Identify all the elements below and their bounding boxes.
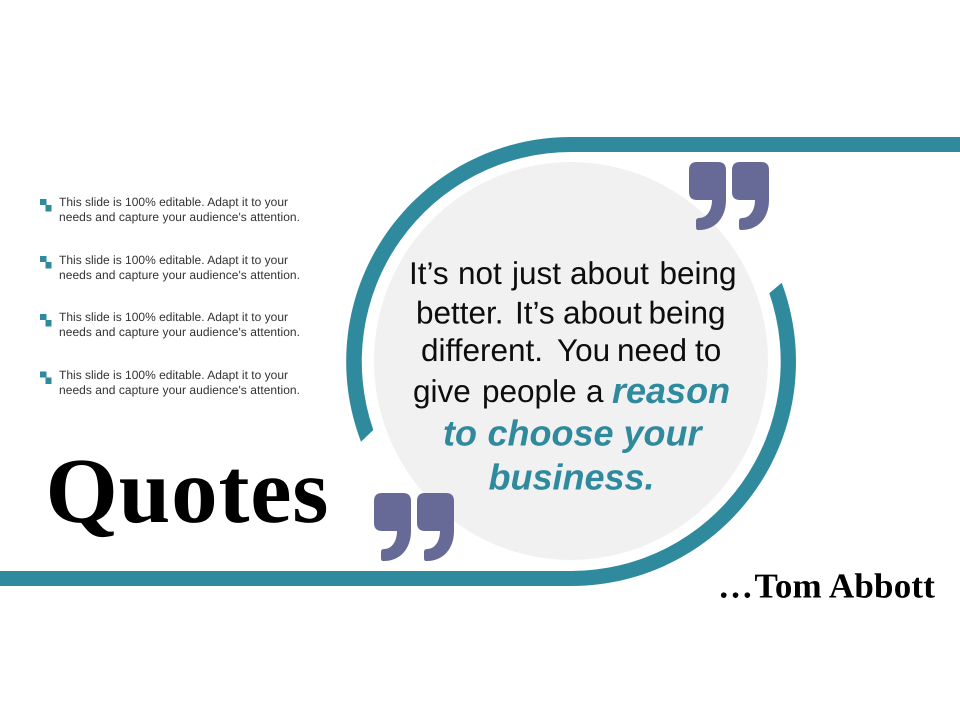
- bullet item 4: [40, 368, 300, 397]
- quote text: people: [482, 373, 577, 409]
- quote text: a: [586, 373, 604, 409]
- attribution: …: [718, 566, 753, 606]
- bullet item 3: [40, 310, 300, 339]
- panel: gray quote circle: [374, 162, 768, 560]
- quote text: better.: [416, 294, 504, 330]
- bullet item 2: needs and capture your audience's attention.: [59, 268, 300, 282]
- bullet item 4: needs and capture your audience's attention.: [59, 383, 300, 397]
- quote text: to: [443, 412, 477, 454]
- quote text: reason: [612, 370, 730, 411]
- quote text: about: [570, 255, 649, 291]
- bullet item 4: This slide is 100% editable. Adapt it to your: [59, 368, 288, 382]
- quote text: You: [557, 332, 610, 368]
- quote text: It’s: [409, 255, 449, 291]
- quote text: just: [511, 255, 561, 291]
- quote text: different.: [421, 332, 543, 368]
- bullet item 1: [40, 195, 300, 224]
- quote text: about: [563, 294, 642, 330]
- teal ring and bars: [0, 137, 960, 586]
- quote text: It’s: [515, 294, 555, 330]
- icon: top quotation mark: [689, 162, 769, 230]
- quote text: business.: [488, 456, 655, 498]
- quote text: being: [660, 255, 737, 291]
- bullet item 1: needs and capture your audience's attention.: [59, 210, 300, 224]
- bullet item 1: This slide is 100% editable. Adapt it to your: [59, 195, 288, 209]
- title: Quotes: [46, 440, 329, 543]
- attribution: Tom Abbott: [754, 566, 935, 606]
- quote text: [409, 255, 737, 498]
- bullet item 2: [40, 253, 300, 282]
- quote text: your: [622, 412, 704, 454]
- bullet item 3: This slide is 100% editable. Adapt it to your: [59, 310, 288, 324]
- bullet list: [40, 195, 300, 397]
- quote text: choose: [488, 412, 614, 454]
- icon: bottom quotation mark: [374, 493, 454, 561]
- quote text: to: [695, 332, 721, 368]
- bullet item 2: This slide is 100% editable. Adapt it to your: [59, 253, 288, 267]
- quote text: need: [617, 332, 687, 368]
- quote text: not: [458, 255, 502, 291]
- quote text: give: [413, 373, 471, 409]
- quote text: being: [648, 294, 726, 330]
- bullet item 3: needs and capture your audience's attention.: [59, 325, 300, 339]
